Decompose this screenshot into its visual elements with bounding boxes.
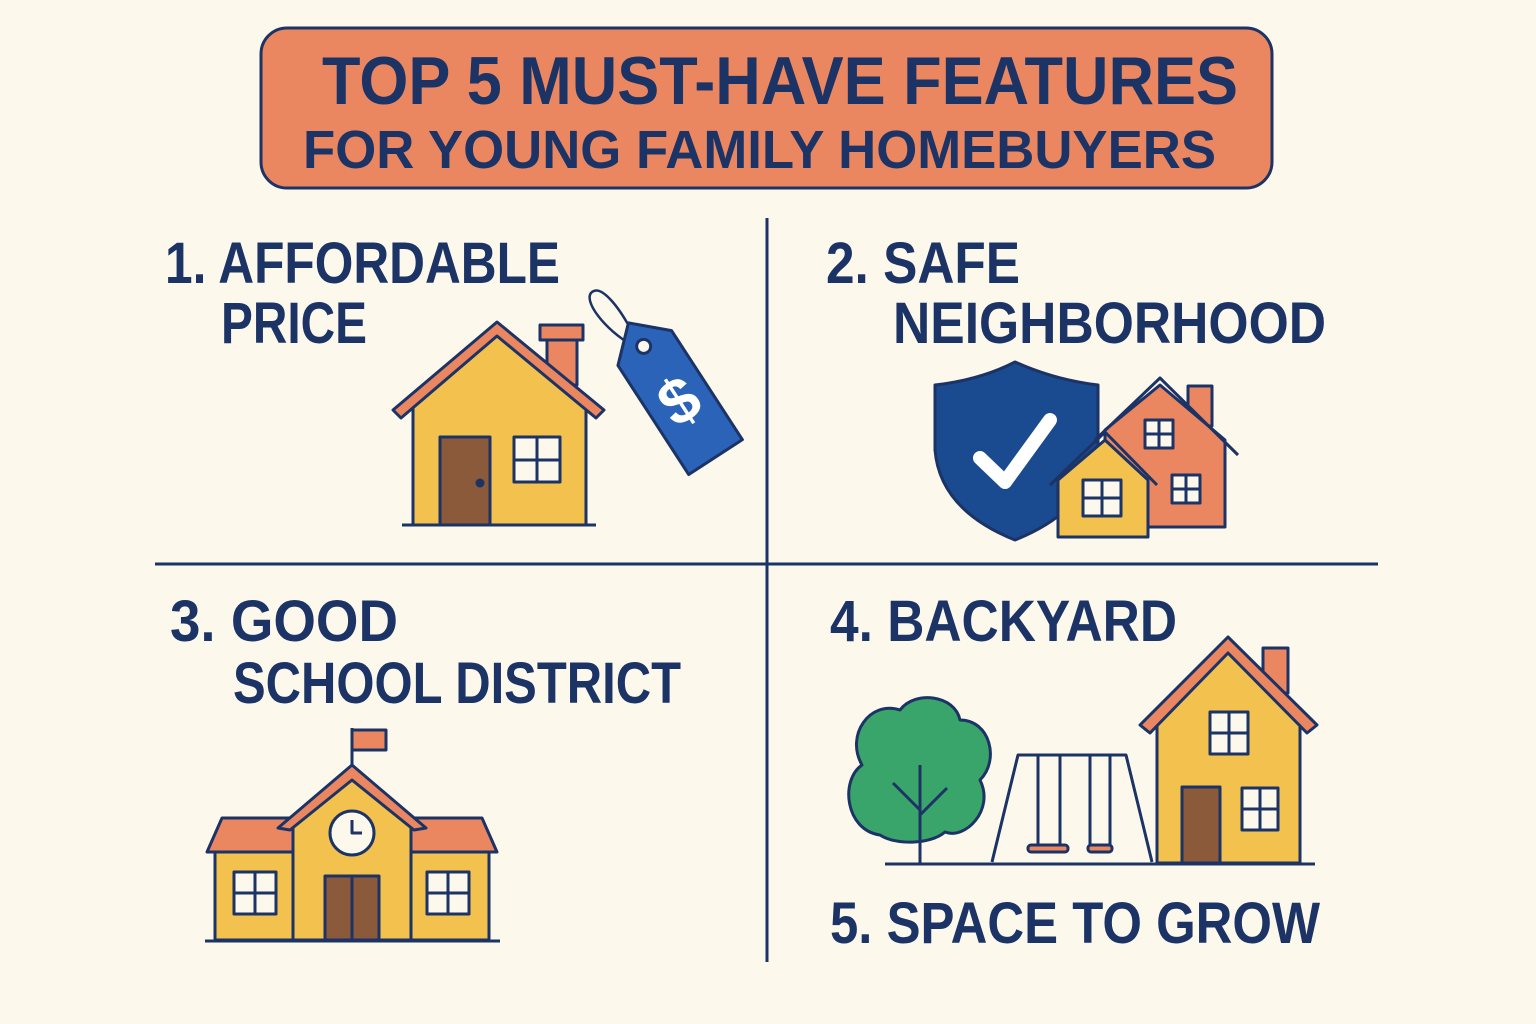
icon: house with price tag: $ bbox=[645, 361, 714, 441]
icon: school bbox=[205, 728, 500, 941]
title banner: TOP 5 MUST-HAVE FEATURES bbox=[322, 43, 1238, 119]
title banner bbox=[261, 28, 1272, 188]
icon: backyard with tree, swing, house bbox=[849, 637, 1317, 865]
icon: shield with houses bbox=[935, 362, 1238, 540]
heading 1: 1. AFFORDABLE bbox=[165, 231, 560, 296]
heading 2: NEIGHBORHOOD bbox=[893, 291, 1326, 356]
heading 2 bbox=[826, 231, 1326, 356]
heading 2: 2. SAFE bbox=[826, 231, 1020, 296]
heading 1: PRICE bbox=[221, 291, 367, 356]
heading 1 bbox=[165, 231, 560, 356]
heading 3 bbox=[170, 589, 681, 716]
heading 3: SCHOOL DISTRICT bbox=[233, 651, 681, 716]
title banner: FOR YOUNG FAMILY HOMEBUYERS bbox=[303, 120, 1216, 180]
heading 4: 4. BACKYARD bbox=[830, 589, 1177, 654]
heading 3: 3. GOOD bbox=[170, 589, 398, 654]
icon: house with price tag bbox=[393, 291, 742, 525]
heading 5: 5. SPACE TO GROW bbox=[830, 891, 1320, 956]
